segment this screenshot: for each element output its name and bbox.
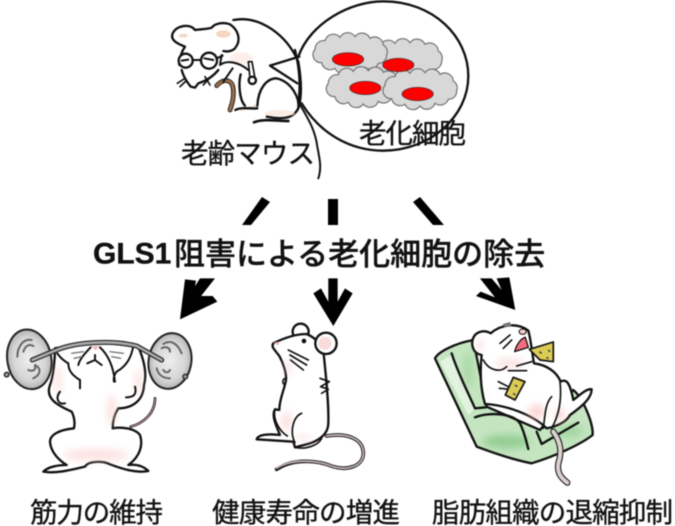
heading: GLS1 inhibition: GLS1 [93,238,171,270]
icon: standing mouse [257,324,337,448]
icon: mouse tail [277,435,363,469]
callout: pointer to circle and mouse tail [270,50,320,178]
arrow: to healthy lifespan mouse [313,278,353,326]
icon: barbell plates [2,326,196,393]
panel: adipose tissue shrinkage mouse in armchair [432,322,673,526]
icon: mouse lifting [32,342,162,472]
arrow: to muscle mouse [180,278,217,319]
callout: magnified circle [298,1,468,151]
panel: healthy lifespan mouse [212,324,400,526]
icon: old mouse with glasses and cane [172,19,301,123]
label: aged mouse: 老齢マウス [181,138,315,169]
arrow stubs: upper three [242,197,444,225]
icon: green armchair [435,340,593,463]
label: senescent cells: 老化細胞 [359,118,466,149]
panel: muscle maintenance mouse with barbell [2,326,196,526]
arrow: to adipose mouse [476,277,515,310]
arrows: lower three [180,277,515,326]
heading: GLS1 inhibition: 阻害による老化細胞の除去 [174,237,545,272]
icon: lounging mouse with cheese [472,322,592,483]
icon: senescent cells [313,33,457,110]
panel: aged mouse and senescent cells [172,1,468,178]
